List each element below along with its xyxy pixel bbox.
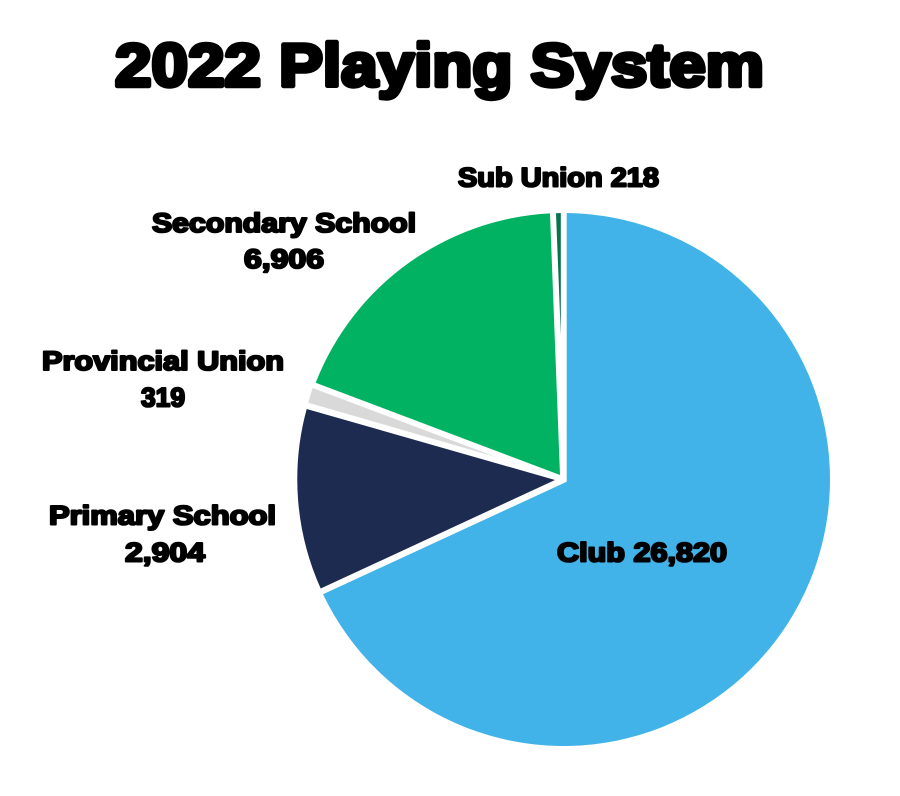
slice: Provincial Union bbox=[308, 388, 497, 457]
label: Secondary School: 6,906 bbox=[244, 244, 324, 274]
label: Provincial Union: 319 bbox=[141, 382, 185, 412]
slice: Club bbox=[323, 213, 830, 746]
title: 2022 Playing System bbox=[115, 32, 764, 99]
slice: Secondary School bbox=[316, 213, 560, 475]
label: Sub Union: Sub Union 218 bbox=[458, 162, 659, 192]
label: Primary School bbox=[49, 500, 276, 568]
label: Provincial Union: Provincial Union bbox=[42, 346, 284, 376]
label: Secondary School: Secondary School bbox=[152, 208, 416, 238]
slice: Sub Union bbox=[556, 213, 561, 335]
label: Provincial Union bbox=[42, 346, 284, 412]
label: Club: Club 26,820 bbox=[557, 538, 727, 568]
slice: Primary School bbox=[297, 409, 555, 588]
label: Primary School: 2,904 bbox=[125, 538, 205, 568]
label: Primary School: Primary School bbox=[49, 500, 276, 530]
pie chart bbox=[297, 213, 830, 746]
label: Secondary School bbox=[152, 208, 416, 274]
